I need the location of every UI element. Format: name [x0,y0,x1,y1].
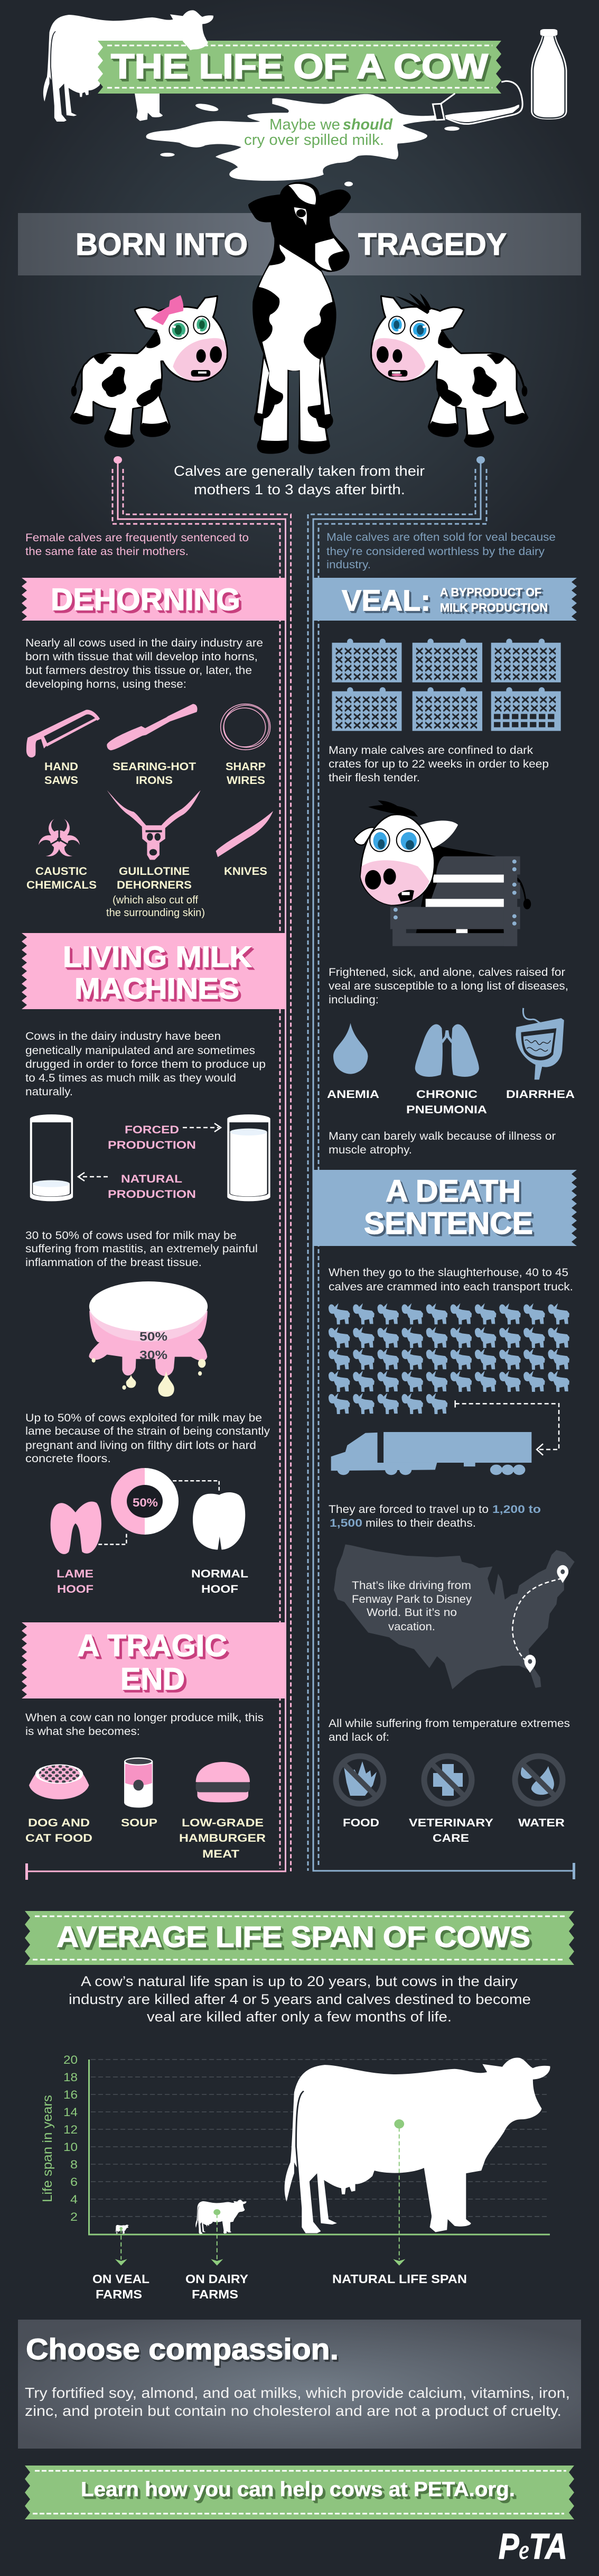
text: crates: their flesh tender. [329,772,420,784]
text: diseases intro [329,966,568,1006]
icon: hand saw [26,710,100,758]
labels: tools row two: CHEMICALS [26,879,97,891]
text: distance [329,1503,541,1529]
text: distance: They are forced to travel up to [329,1503,489,1516]
text: life span intro: veal are killed after only a few months of life. [147,2009,452,2025]
text: mastitis: 30 to 50% of cows used for milk may be [25,1230,237,1242]
text: genetic manipulation: genetically manipulated and are sometimes [25,1045,255,1057]
panel: living milk machines [22,933,286,1595]
labels: tools row one: HAND [44,761,78,773]
icon: guillotine dehorner [107,790,201,860]
bar: natural life span cow [285,2058,550,2233]
labels: lack of: FOOD [343,1817,379,1829]
labels: tools row one: WIRES [227,774,265,787]
heading: choose compassion: Choose compassion. [26,2332,339,2366]
chart: lame hoof donut [111,1468,179,1535]
chart: life span [40,2053,550,2301]
axis labels: 12 [63,2123,78,2136]
text: fenway to disney: That’s like driving from [352,1580,471,1592]
labels: hooves [57,1568,248,1595]
text: crates [329,744,549,784]
labels: production: PRODUCTION [108,1188,196,1201]
labels: what she becomes: SOUP [121,1817,157,1829]
connector: pink lines [25,456,291,1880]
text: lameness: concrete floors. [25,1453,111,1465]
text: distance: miles to their deaths. [366,1517,476,1529]
panel: choose compassion [18,2320,581,2449]
arrow: forced production [183,1123,221,1132]
heading: byproduct [440,586,548,614]
bar: veal farm calf [115,2224,129,2234]
text: crates: Many male calves are confined to dark [329,744,534,756]
icon: cow silhouette behind banner [43,10,213,122]
text: lameness: Up to 50% of cows exploited for milk may be [25,1412,262,1424]
text: male calves: Male calves are often sold for veal because [326,531,556,543]
labels: what she becomes: MEAT [202,1848,239,1860]
text: lameness: lame because of the strain of being constantly [25,1425,270,1437]
axis labels: 8 [70,2158,78,2171]
text: fenway to disney: vacation. [388,1621,435,1633]
banner: a tragic end [22,1622,286,1698]
icon: forced production glass [227,1114,270,1201]
text: female calves: the same fate as their mothers. [25,546,189,558]
text: genetic manipulation: to 4.5 times as much milk as they would [25,1072,236,1084]
text: life span intro: A cow’s natural life span is up to 20 years, but cows in the dairy [81,1973,518,1989]
text: life span intro: industry are killed after 4 or 5 years and calves destined to become [69,1991,531,2007]
axis labels: 16 [63,2088,78,2101]
chart: udder percentages: 50% [139,1329,167,1343]
labels: lack of: VETERINARY [409,1817,493,1829]
icon: female calf [71,295,227,447]
heading: a death sentence: SENTENCE [364,1206,533,1241]
text: try fortified milks [25,2385,570,2419]
icon: lungs [415,1024,479,1077]
heading: a tragic end: END [120,1662,185,1696]
text: lack of: All while suffering from temperature extremes [329,1718,570,1730]
labels: tools row one: SEARING-HOT [113,761,196,773]
text: female calves: Female calves are frequently sentenced to [25,532,249,544]
text: distance: 1,500 [330,1517,362,1529]
axis labels: 14 [63,2106,78,2119]
labels: what she becomes: HAMBURGER [179,1832,266,1844]
labels: diseases [327,1088,575,1116]
heading: byproduct: MILK PRODUCTION [440,601,548,614]
banner: dehorning [22,578,286,621]
heading: living milk machines [63,940,252,1005]
banner: a death sentence [313,1170,577,1246]
text: genetic manipulation: naturally. [25,1086,73,1098]
connector: blue lines [308,456,575,1879]
text: fenway to disney: World. But it’s no [367,1606,457,1619]
icon: mother cow [248,182,351,454]
heading: byproduct: A BYPRODUCT OF [440,586,541,599]
labels: what she becomes: CAT FOOD [25,1832,92,1844]
labels: tools row two: CAUSTIC [35,865,87,878]
text: crates: crates for up to 22 weeks in order to keep [329,758,549,770]
icon: spilled milk [146,94,460,181]
subtitle: Maybe we [269,116,340,133]
heading: born into: BORN INTO [76,227,248,262]
labels: diseases: CHRONIC [416,1088,478,1101]
labels: lack of [343,1817,565,1844]
icon: searing-hot iron [107,704,198,750]
text: what she becomes [25,1712,264,1738]
labels: diseases: DIARRHEA [506,1088,575,1101]
text: genetic manipulation: drugged in order to force them to produce up [25,1058,266,1070]
cows and markers [115,2058,550,2266]
text: genetic manipulation [25,1030,266,1098]
text: male calves: industry. [326,559,371,571]
subtitle: should [343,116,393,133]
labels: tools row two: DEHORNERS [117,879,192,891]
labels: tools row two: (which also cut off [113,894,198,906]
text: dehorning intro [25,637,263,690]
text: male calves [326,531,556,571]
icon: hamburger [196,1762,250,1802]
banner: call to action [25,2466,574,2519]
axis labels: 6 [70,2175,78,2189]
labels: hooves: NORMAL [191,1568,248,1580]
icon: knife [216,811,273,857]
icon: lame hoof [51,1501,126,1554]
banner: title ribbon [98,41,501,94]
text: try fortified milks: Try fortified soy, almond, and oat milks, which provide calcium, vitamins, iron, [25,2385,570,2401]
text: transport [329,1267,573,1293]
heading: dehorning: DEHORNING [51,583,240,617]
text: dehorning intro: Nearly all cows used in the dairy industry are [25,637,263,649]
icon: sharp wire [221,704,270,750]
text: female calves [25,532,249,558]
text: male calves: they’re considered worthless by the dairy [326,546,545,558]
section: average life span [25,1911,574,2301]
panel: a death sentence [313,1170,577,1844]
labels: life span: NATURAL LIFE SPAN [332,2272,467,2286]
grid lines [91,2060,549,2217]
icon: blood drop [333,1023,368,1074]
section: born into tragedy band [18,213,581,275]
text: calves taken: Calves are generally taken from their [174,463,425,479]
icon: pet food bowl [29,1765,89,1799]
labels: tools row one: SHARP [226,761,266,773]
subtitle [244,116,393,149]
labels: tools row two: GUILLOTINE [119,865,190,878]
labels: hooves: HOOF [201,1583,238,1595]
text: transport: calves are crammed into each transport truck. [329,1281,573,1293]
text: life span intro [69,1973,531,2025]
labels: what she becomes: LOW-GRADE [182,1817,264,1829]
text: what she becomes: is what she becomes: [25,1725,140,1738]
icon: no veterinary care [424,1756,472,1804]
icon: no food [336,1756,383,1804]
heading: living milk machines: LIVING MILK [63,940,252,973]
icon: normal hoof [173,1481,245,1549]
icon: map pins [525,1565,568,1673]
heading: living milk machines: MACHINES [74,972,239,1005]
text: barely walk [329,1130,556,1156]
icon: milk bottle [531,29,567,119]
text: calves taken [174,463,425,497]
heading: life span: AVERAGE LIFE SPAN OF COWS [57,1920,530,1953]
icon: pink bow [151,295,183,325]
text: fenway to disney: Fenway Park to Disney [352,1593,472,1605]
chart: lame hoof donut: 50% [133,1496,158,1509]
arrow: calves to truck [455,1400,559,1455]
labels: what she becomes: DOG AND [28,1817,90,1829]
text: mastitis: inflammation of the breast tissue. [25,1257,202,1269]
text: lameness [25,1412,270,1465]
heading: veal: VEAL: [342,584,430,617]
text: lack of [329,1718,570,1743]
text: dehorning intro: born with tissue that will develop into horns, [25,651,258,663]
text: lameness: pregnant and living on filthy dirt lots or hard [25,1439,256,1452]
banner: living milk machines [22,933,286,1009]
axis labels: 4 [70,2193,78,2206]
labels: tools row two: KNIVES [224,865,267,878]
icon: calf in crate [354,800,531,946]
labels: tools row two: the surrounding skin) [106,907,205,919]
labels: what she becomes [25,1817,266,1860]
text: transport: When they go to the slaughterhouse, 40 to 45 [329,1267,568,1279]
icon: intestines [516,1008,564,1079]
labels: tools row one: SAWS [44,774,78,787]
labels: tools row two [26,865,267,919]
icon: cow muzzle over banner [183,37,208,50]
chart: calves pictogram [329,1303,569,1414]
heading: a tragic end [77,1629,227,1696]
icon: calendars [332,639,561,731]
text: fenway to disney [352,1580,472,1633]
labels: hooves: LAME [57,1568,93,1580]
labels: tools row one [44,761,266,787]
icon: US map [334,1544,575,1689]
labels: life span [92,2272,467,2301]
text: distance: 1,200 to [492,1503,541,1516]
axis title: Life span in years [40,2095,55,2202]
labels: life span: FARMS [192,2287,238,2301]
text: calves taken: mothers 1 to 3 days after birth. [194,482,405,497]
panel: dehorning [22,578,286,919]
banner: life span ribbon [25,1911,574,1965]
icon: male calf [371,293,528,447]
text: dehorning intro: but farmers destroy this tissue or, later, the [25,664,252,677]
text: barely walk: muscle atrophy. [329,1144,412,1156]
axis labels: 18 [63,2071,78,2084]
text: diseases intro: veal are susceptible to a long list of diseases, [329,980,568,992]
title: THE LIFE OF A COW [111,47,489,86]
heading: tragedy: TRAGEDY [358,227,507,262]
chart: udder percentages [89,1281,208,1397]
icon: no water [515,1756,563,1804]
heading: a death sentence [364,1174,533,1241]
labels: life span: ON VEAL [92,2272,149,2286]
labels: hooves: HOOF [57,1583,93,1595]
text: mastitis: suffering from mastitis, an extremely painful [25,1243,258,1255]
panel: veal [313,578,577,1156]
labels: diseases: PNEUMONIA [406,1104,487,1116]
icon: tipped milk bottle [433,81,522,124]
labels: lack of: WATER [518,1817,565,1829]
logo: PETA: PeTA [499,2526,567,2566]
axis labels: 2 [70,2210,78,2223]
text: mastitis [25,1230,258,1269]
text: learn how: Learn how you can help cows at PETA.org. [81,2478,515,2501]
text: lack of: and lack of: [329,1731,389,1743]
icon: transport truck [331,1432,531,1475]
axis [89,2060,550,2235]
labels: production: FORCED [125,1124,179,1136]
text: genetic manipulation: Cows in the dairy industry have been [25,1030,221,1042]
text: diseases intro: Frightened, sick, and alone, calves raised for [329,966,565,978]
text: what she becomes: When a cow can no longer produce milk, this [25,1712,264,1724]
axis labels: 20 [63,2053,78,2066]
text: diseases intro: including: [329,994,379,1006]
bar: dairy farm cow [195,2200,246,2234]
labels: life span: ON DAIRY [185,2272,248,2286]
section: header [43,10,567,181]
labels: tools row one: IRONS [136,774,173,787]
icon: biohazard [38,817,80,856]
icon: crate slats [390,856,520,946]
axis labels: 10 [63,2140,78,2154]
heading: a tragic end: A TRAGIC [77,1629,227,1663]
thought bubble [344,182,353,186]
labels: production: PRODUCTION [108,1139,196,1151]
arrow: natural production [78,1172,108,1181]
labels: diseases: ANEMIA [327,1088,379,1101]
panel: a tragic end [22,1622,286,1860]
labels: production [108,1124,196,1201]
subtitle: cry over spilled milk. [244,132,384,149]
labels: life span: FARMS [96,2287,142,2301]
chart: udder percentages: 30% [139,1348,167,1362]
icon: natural production glass [30,1114,73,1201]
heading: a death sentence: A DEATH [386,1174,521,1208]
banner: veal [313,578,577,621]
labels: production: NATURAL [121,1173,182,1185]
axis labels [63,2053,78,2223]
icon: soup can [124,1758,153,1808]
text: dehorning intro: developing horns, using these: [25,678,186,690]
text: try fortified milks: zinc, and protein but contain no cholesterol and are not a product of cruelty. [25,2403,561,2419]
text: barely walk: Many can barely walk because of illness or [329,1130,556,1142]
labels: lack of: CARE [433,1832,469,1844]
